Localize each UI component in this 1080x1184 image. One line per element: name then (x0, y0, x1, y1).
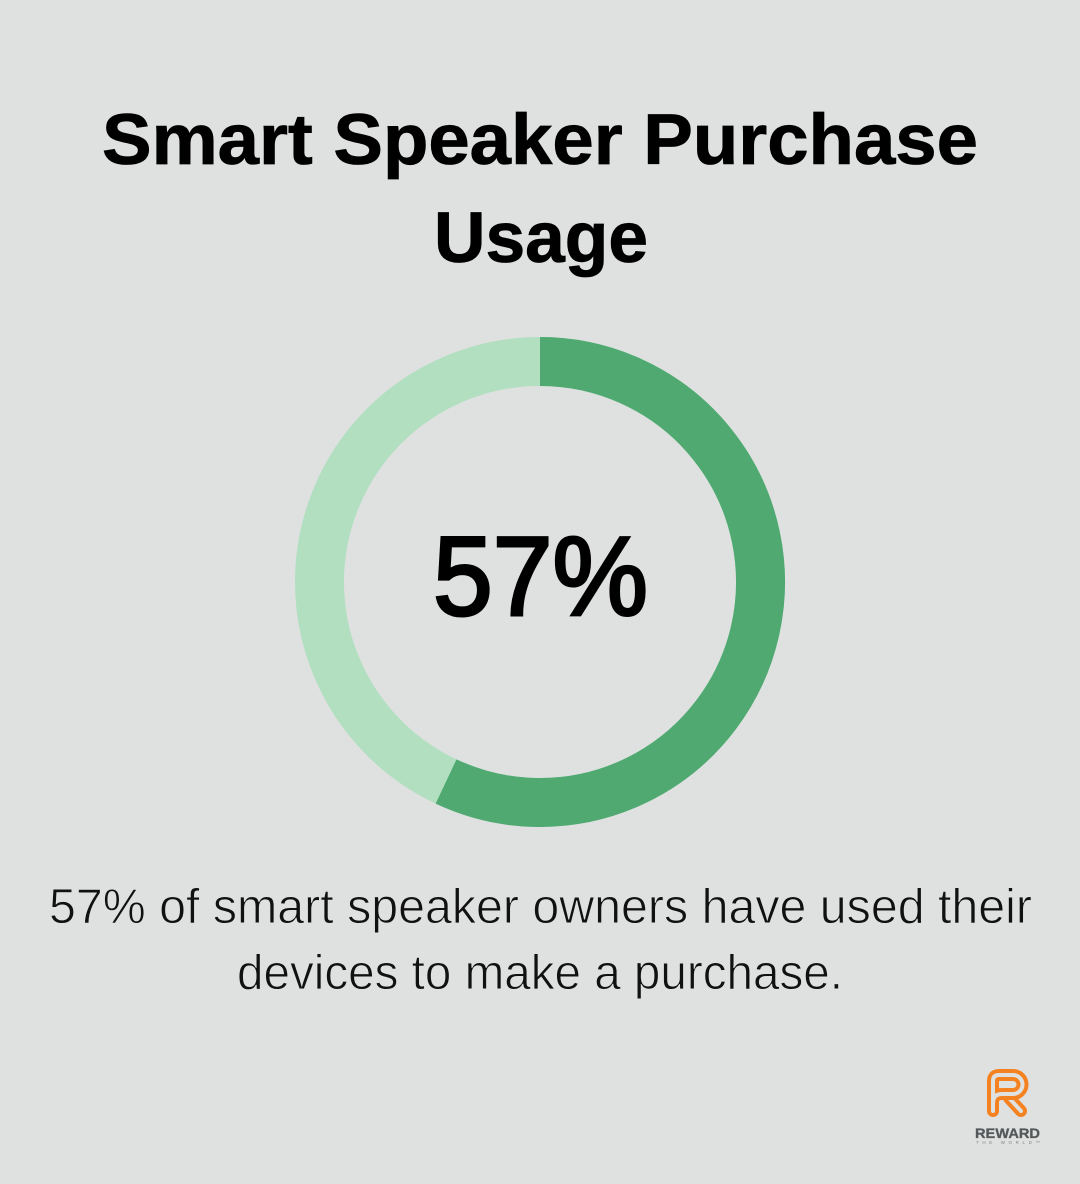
donut track: remaining 43% (320, 362, 760, 802)
logo tagline: THE WORLD™ (976, 1140, 1040, 1145)
donut segment: 57% (446, 362, 761, 803)
description text: 57% of smart speaker owners have used their (49, 880, 1032, 934)
description text: devices to make a purchase. (237, 946, 843, 1000)
icon: orange R mark (993, 1075, 1022, 1111)
description text (49, 880, 1032, 1000)
title (102, 101, 978, 278)
title: Smart Speaker Purchase (102, 101, 978, 180)
logo: Reward the World (975, 1075, 1040, 1145)
donut chart: 57% (320, 362, 761, 803)
logo wordmark: REWARD (975, 1126, 1040, 1141)
center value: 57% (433, 514, 648, 639)
title: Usage (434, 199, 648, 278)
